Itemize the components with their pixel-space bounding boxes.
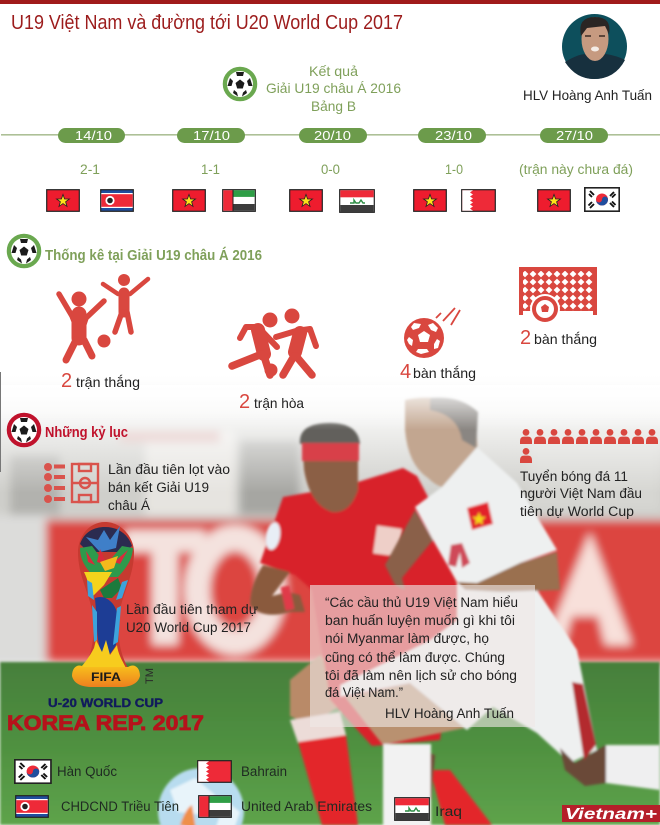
icon: two players fighting for ball [232,308,316,376]
icon: goal net [521,269,595,324]
legend of group flags [15,760,462,820]
logo: Vietnam+ [562,805,660,823]
icon: tactics board [44,463,98,503]
stadium backdrop [0,380,660,665]
scores [80,162,633,177]
draws label [239,391,304,413]
icon: trophy [72,522,140,687]
record: semi-final [44,462,230,513]
quote text: “Các cầu thủ U19 Việt Nam hiểu [325,595,518,610]
record: first U20 World Cup: Lần đầu tiên tham dự [126,602,258,617]
stats heading text: Thống kê tại Giải U19 châu Á 2016 [45,247,262,264]
records heading text: Những kỷ lục [45,425,128,441]
date pills: 20/10 [314,128,351,143]
quote panel [310,585,535,727]
goals conceded label: bàn thắng [534,331,597,347]
legend: Bahrain: Bahrain [241,764,287,779]
legend: South Korea: Hàn Quốc [57,764,117,779]
stat: 2 goals conceded [520,269,597,349]
icon: trophy: FIFA [91,672,121,684]
trademark: TM [144,668,156,684]
stats heading [9,236,262,266]
cup name: U-20 WORLD CUP [48,696,163,710]
team text: tiên dự World Cup [520,504,634,519]
record: first U20 World Cup: U20 World Cup 2017 [126,620,251,635]
wins label: 2 [61,370,72,392]
quote text [325,595,518,721]
goals scored label: 4 [400,361,411,383]
wins label [61,370,140,392]
icon: soccer ball green [9,236,39,266]
icon: eleven people [520,429,658,463]
legend: UAE: United Arab Emirates [241,799,372,814]
legend: Bahrain [198,761,287,782]
legend: North Korea: CHDCND Triều Tiên [61,799,179,814]
date pills: 17/10 [193,128,230,143]
quote text: tôi đã làm nên lịch sử cho bóng [325,668,517,683]
goals scored label [400,361,476,383]
scores: 2-1 [80,162,100,177]
scores: 1-1 [201,162,220,177]
team text: người Việt Nam đầu [520,486,642,501]
results heading text: Giải U19 châu Á 2016 [266,80,401,96]
semi-final text: Lần đầu tiên lọt vào [108,462,230,477]
grass field [0,662,660,825]
logo: Vietnam+: Vietnam+ [565,806,657,823]
stat: 2 draws [232,308,316,413]
host name: KOREA REP. 2017 [7,712,204,735]
coach portrait [562,14,627,79]
legend: North Korea [16,796,179,817]
results heading text [266,63,401,114]
trophy logo: U-20 World Cup [7,522,204,735]
draws label: 2 [239,391,250,413]
records heading [9,415,128,445]
light fade on players [0,385,660,430]
quote text: nói Myanmar làm được, họ [325,631,489,646]
draws label: trận hòa [254,395,304,411]
goals conceded label [520,327,597,349]
results heading text: Kết quả [309,63,358,79]
scores: 0-0 [321,162,340,177]
date pills [58,128,608,143]
results heading [225,63,401,114]
header bar [0,0,660,4]
quote text: cũng có thể làm được. Chúng [325,650,505,665]
date pills: 23/10 [435,128,472,143]
legend: Iraq [395,798,462,820]
date pills: 14/10 [75,128,112,143]
title: U19 Việt Nam và đường tới U20 World Cup 2017 [11,12,403,34]
icon: celebrating players [59,274,148,360]
record: first U20 World Cup [126,602,258,635]
legend: South Korea [15,760,117,783]
player in white [340,398,660,825]
stat: 4 goals scored [400,308,476,383]
match flags [47,188,619,212]
record: first 11-a-side team [520,429,658,519]
player in red [250,423,492,825]
date pills: 27/10 [556,128,593,143]
scores: 1-0 [445,162,463,177]
legend: UAE [199,796,372,817]
background fade into page [0,368,660,493]
wins label: trận thắng [76,374,140,390]
scores: (trận này chưa đá) [519,162,633,177]
quote text: ban huấn luyện muốn gì khi tôi [325,613,515,628]
team text: Tuyển bóng đá 11 [520,469,628,484]
team text [520,469,642,519]
soccer ball in background [158,768,244,825]
stat: 2 wins [59,274,148,392]
quote text: HLV Hoàng Anh Tuấn [385,706,514,721]
goals conceded label: 2 [520,327,531,349]
icon: soccer ball green [225,69,255,99]
goals scored label: bàn thắng [413,365,476,381]
semi-final text [108,462,230,513]
semi-final text: bán kết Giải U19 [108,480,209,495]
timeline of matches [1,128,660,212]
semi-final text: châu Á [108,498,150,513]
icon: soccer ball red [9,415,39,445]
results heading text: Bảng B [311,98,356,114]
quote text: đá Việt Nam.” [325,685,403,700]
icon: flying ball [404,308,460,358]
background photo: football match [0,368,660,825]
coach caption: HLV Hoàng Anh Tuấn [523,87,652,103]
legend: Iraq: Iraq [435,804,462,819]
